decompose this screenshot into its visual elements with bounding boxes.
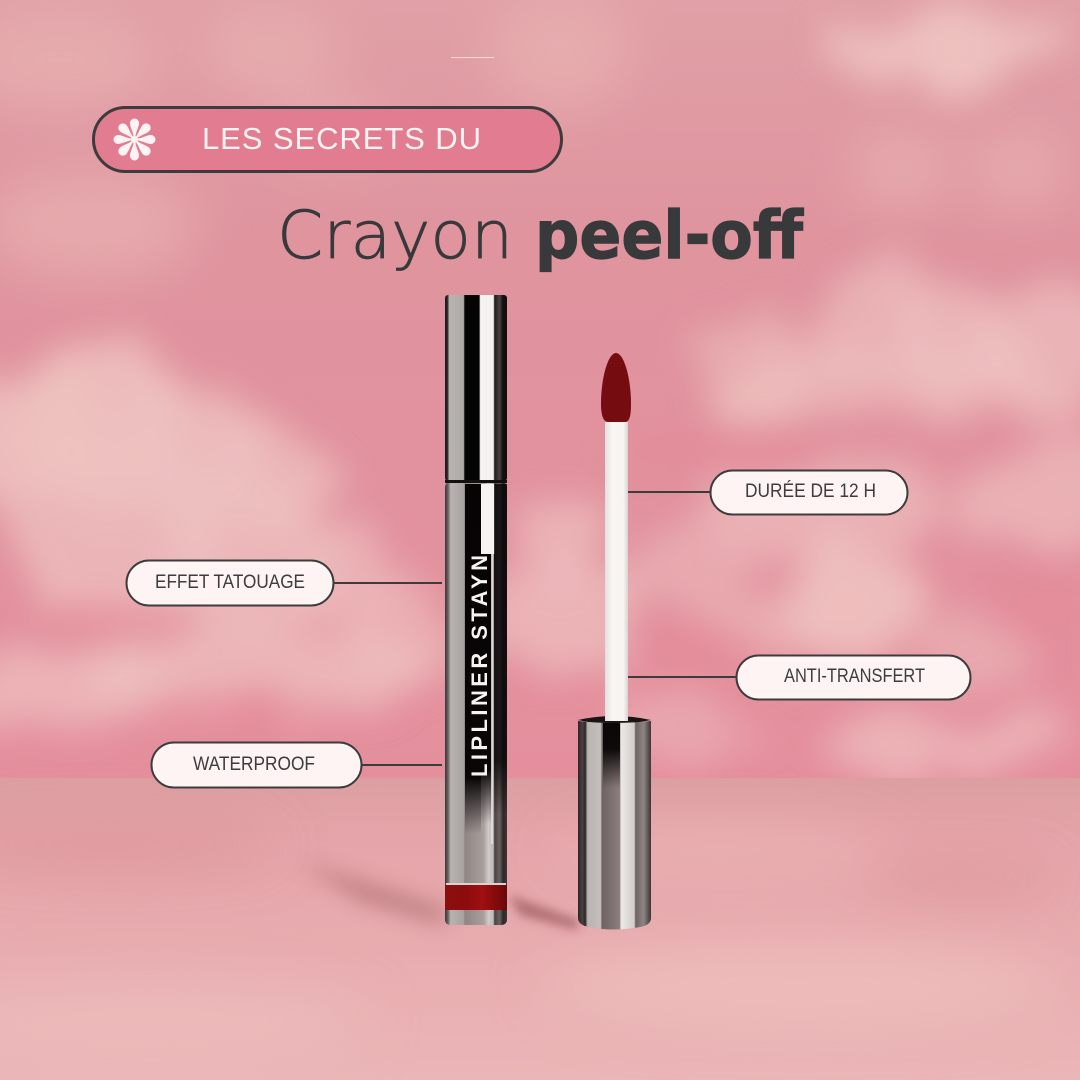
callout: effet tatouage: [126, 560, 442, 606]
header pill: [94, 108, 562, 172]
applicator tip: [601, 353, 631, 422]
center cloud: [510, 495, 600, 585]
product: closed lipliner tube: [445, 295, 507, 925]
icon: flower: [114, 118, 156, 160]
tube band: [445, 885, 507, 910]
right cloud: [700, 315, 820, 435]
background: pink cloud sky: [0, 0, 1080, 790]
callout: waterproof: [152, 742, 442, 788]
callout: anti-transfert: [628, 656, 970, 700]
tube brand text: LIPLINER STAYN: [467, 555, 492, 777]
header label: LES SECRETS DU: [202, 121, 481, 156]
product: applicator: [578, 353, 651, 930]
cap: [578, 700, 651, 930]
small highlight mark: [451, 57, 494, 58]
callout: durée de 12 h: DURÉE DE 12 H: [745, 481, 876, 502]
background: floor: [0, 778, 1080, 1080]
callout: waterproof: WATERPROOF: [193, 754, 315, 775]
title: peel-off: [535, 197, 804, 274]
callout: anti-transfert: ANTI-TRANSFERT: [784, 666, 925, 687]
title: [277, 197, 804, 274]
title: Crayon: [277, 197, 513, 274]
callout: effet tatouage: EFFET TATOUAGE: [155, 572, 305, 593]
top right cloud: [830, 20, 1070, 84]
product shadows: [300, 862, 578, 930]
left cloud: [37, 326, 174, 443]
callout: durée de 12 h: [628, 470, 908, 514]
